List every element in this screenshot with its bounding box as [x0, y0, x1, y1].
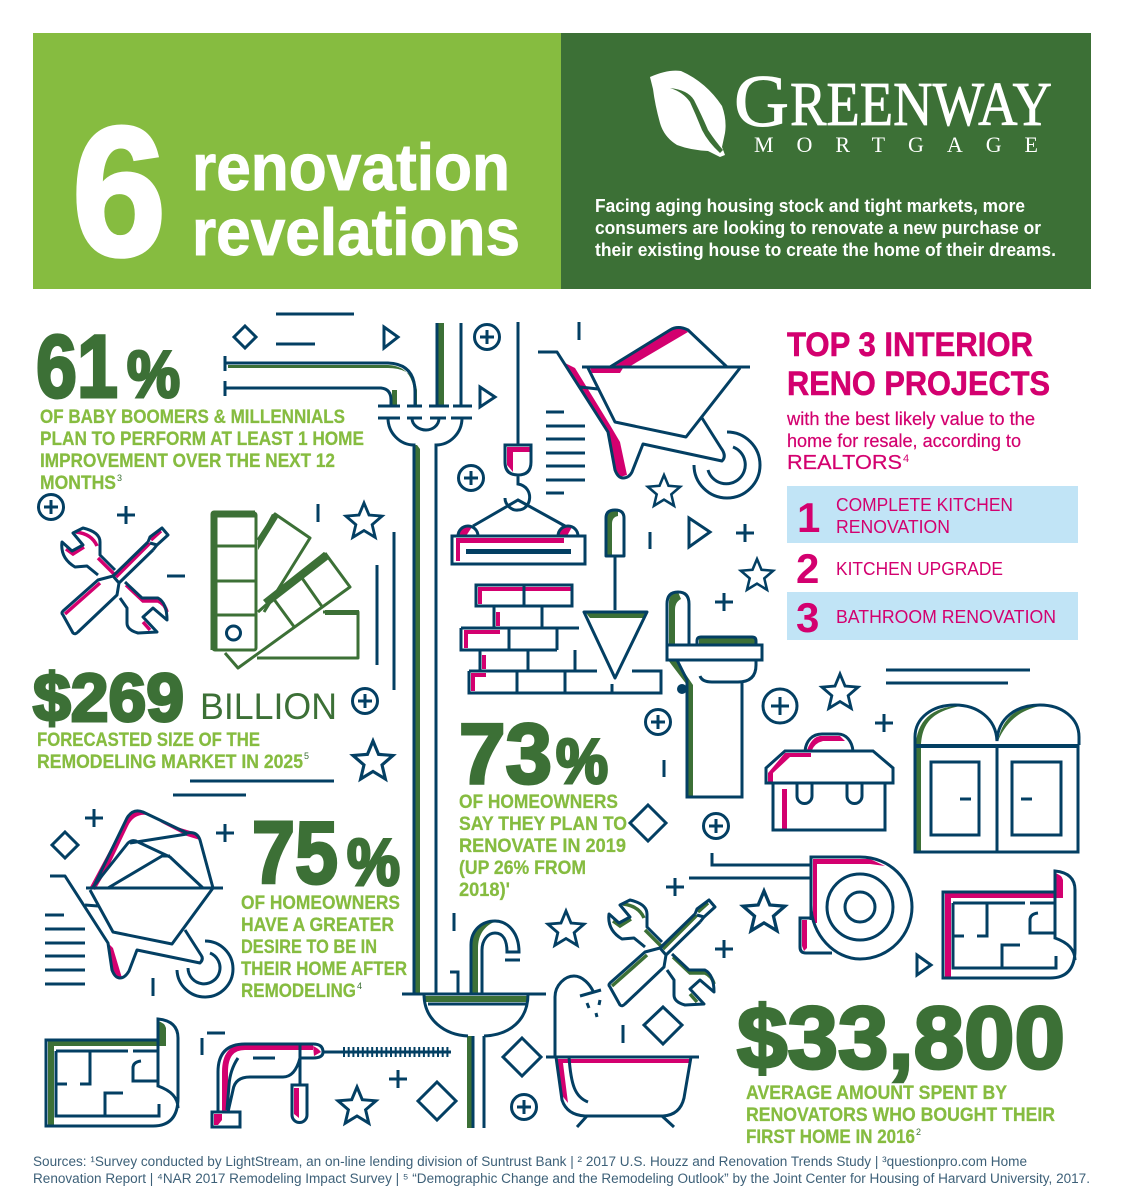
statistic: 75 percent: OF HOMEOWNERS [241, 892, 400, 914]
icon: wheelbarrow, lower left [50, 811, 233, 997]
statistic: 33,800 [737, 988, 1065, 1148]
heading: TOP 3 INTERIOR [787, 326, 1033, 364]
intro paragraph [595, 196, 1056, 260]
decorative icons: diamonds, triangles, plus signs, stars [38, 314, 1030, 1123]
statistic: 269 billion [33, 660, 337, 773]
subheading [786, 409, 1035, 474]
statistic: 61 percent: 3 [117, 473, 122, 483]
statistic: 269 billion: 5 [304, 751, 309, 761]
icon: bathtub with shower [546, 976, 699, 1127]
statistic: 73 percent: % [556, 727, 608, 797]
title: renovation revelations [192, 130, 520, 269]
list item 2: KITCHEN UPGRADE [836, 558, 1003, 579]
statistic: 33,800: FIRST HOME IN 2016 [746, 1126, 915, 1148]
heading: RENO PROJECTS [787, 365, 1050, 403]
statistic: 75 percent: HAVE A GREATER [241, 914, 394, 936]
statistic: 61 percent: MONTHS [40, 472, 116, 494]
list item 3: 3 [796, 594, 819, 641]
statistic: 33,800: RENOVATORS WHO BOUGHT THEIR [746, 1104, 1055, 1126]
icon: wrench and screwdriver, pink [62, 528, 168, 634]
logo: wordmark: MORTGAGE [754, 132, 1038, 157]
statistic: 75 percent [241, 803, 407, 1002]
intro paragraph: Facing aging housing stock and tight markets, more [595, 196, 1025, 216]
list item 3: BATHROOM RENOVATION [836, 606, 1056, 627]
plumbing: central pipe network [225, 323, 472, 993]
subheading: REALTORS [787, 452, 902, 474]
list item 1 [787, 486, 1078, 543]
statistic: 75 percent: 4 [357, 981, 362, 991]
icon: paint swatch fan [213, 513, 359, 668]
logo: leaf [650, 71, 726, 157]
statistic: 33,800: AVERAGE AMOUNT SPENT BY [746, 1082, 1007, 1104]
statistic: 73 percent: RENOVATE IN 2019 [459, 835, 626, 857]
statistic: 73 percent: (UP 26% FROM [459, 857, 586, 879]
list item 1: 1 [797, 494, 820, 541]
statistic: 61 percent [36, 316, 364, 494]
icon: tape measure [689, 853, 912, 959]
sources footnote: Sources: ¹Survey conducted by LightStream, an on-line lending division of Suntrust Bank | ² 2017 U.S. Houzz and Renovation Trends Study | ³questionpro.com Home [33, 1154, 1027, 1169]
title: renovation revelations: renovation [192, 130, 510, 204]
statistic: 75 percent: % [347, 825, 400, 899]
list item 2 [796, 545, 1003, 592]
statistic: 75 percent: DESIRE TO BE IN [241, 936, 377, 958]
list item 3 [787, 592, 1078, 641]
statistic: 75 percent: 75 [252, 803, 338, 902]
statistic: 269 billion: FORECASTED SIZE OF THE [37, 729, 260, 751]
list item 1: RENOVATION [836, 516, 950, 537]
list item 1: COMPLETE KITCHEN [836, 494, 1013, 515]
logo: wordmark: REENWAY [790, 71, 1052, 139]
subheading: 4 [903, 453, 909, 465]
statistic: 33,800: 2 [916, 1127, 921, 1137]
title: number 6: 6 [72, 88, 166, 294]
icon: double doors [915, 705, 1079, 852]
panel: top 3 interior reno projects [786, 326, 1078, 641]
icon: toilet [667, 592, 762, 797]
icon: wrench and screwdriver, green [609, 900, 715, 1006]
statistic: 33,800: $33,800 [737, 988, 1065, 1087]
statistic: 61 percent: IMPROVEMENT OVER THE NEXT 12 [40, 450, 335, 472]
statistic: 75 percent: THEIR HOME AFTER [241, 958, 407, 980]
header panel: logo and intro [561, 33, 1091, 289]
statistic: 61 percent: % [127, 337, 180, 411]
icon: brick wall [461, 585, 661, 693]
intro paragraph: consumers are looking to renovate a new purchase or [595, 218, 1041, 238]
statistic: 73 percent [459, 707, 627, 901]
icon: crane hook with load [452, 322, 585, 564]
statistic: 269 billion: $269 [33, 660, 184, 736]
sources footnote [33, 1154, 1090, 1186]
statistic: 269 billion: REMODELING MARKET IN 2025 [37, 751, 303, 773]
logo: wordmark [734, 61, 1052, 157]
statistic: 61 percent: PLAN TO PERFORM AT LEAST 1 HOME [40, 428, 364, 450]
icon: wheelbarrow, top [538, 326, 760, 498]
subheading: with the best likely value to the [786, 409, 1035, 429]
icon: drill [202, 1033, 451, 1127]
statistic: 61 percent: 61 [36, 316, 118, 416]
logo: wordmark: G [734, 61, 789, 143]
header panel: left title block [33, 33, 561, 294]
icon: sink with faucet [402, 913, 546, 1128]
icon: blueprint, pink [943, 871, 1075, 978]
statistic: 61 percent: OF BABY BOOMERS & MILLENNIALS [40, 406, 345, 428]
title: renovation revelations: revelations [192, 195, 520, 269]
icon: blueprint, green [46, 1019, 178, 1126]
list item 2: 2 [796, 545, 819, 592]
heading [787, 326, 1050, 403]
sources footnote: Renovation Report | ⁴NAR 2017 Remodeling Impact Survey | ⁵ “Demographic Change and the Remodeling Outlook” by the Joint Center for Housing of Harvard University, 2017. [33, 1171, 1090, 1186]
statistic: 75 percent: REMODELING [241, 980, 356, 1002]
icon: toolbox [766, 734, 893, 830]
icon: trowel [584, 510, 647, 678]
statistic: 73 percent: OF HOMEOWNERS [459, 791, 618, 813]
statistic: 73 percent: SAY THEY PLAN TO [459, 813, 627, 835]
subheading: home for resale, according to [787, 431, 1021, 451]
intro paragraph: their existing house to create the home of their dreams. [595, 240, 1056, 260]
statistic: 73 percent: 73 [459, 707, 552, 802]
statistic: 73 percent: 2018)' [459, 879, 510, 901]
statistic: 269 billion: BILLION [200, 686, 337, 727]
